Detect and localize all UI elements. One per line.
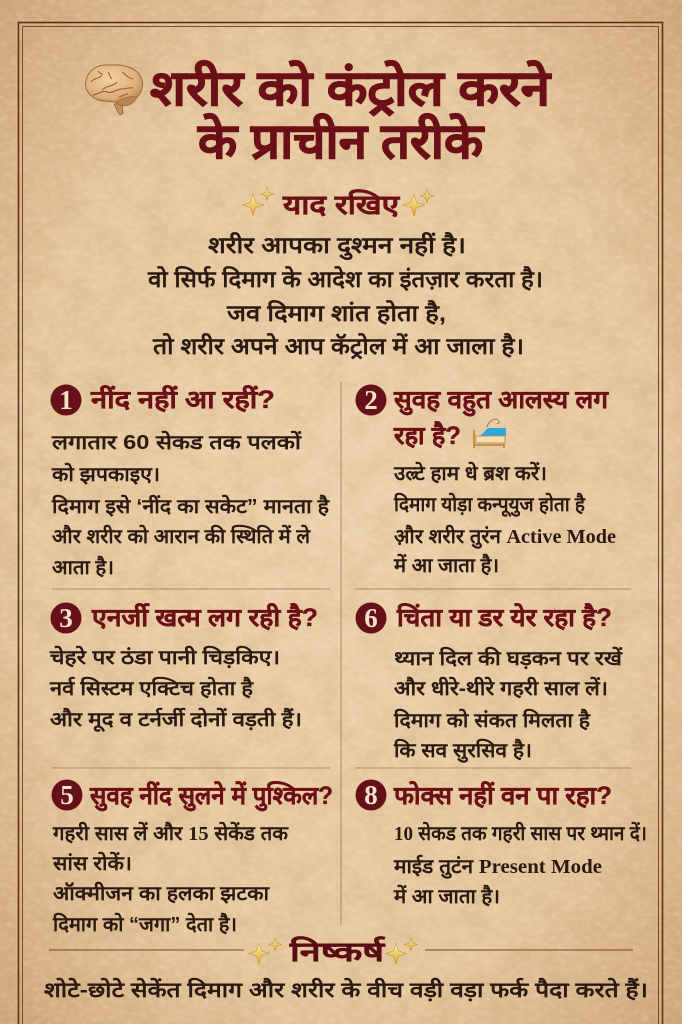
intro text: वो सिर्फ दिमाग के आदेश का इंतज़ार करता है। bbox=[147, 265, 543, 292]
icon: bed bbox=[474, 419, 506, 448]
intro text: जव दिमाग शांत होता है, bbox=[226, 299, 446, 326]
heading: conclusion bbox=[49, 936, 633, 967]
panel: tip 5: ऑक्मीजन का हलका झटका bbox=[53, 881, 270, 905]
panel: tip 1: आता है। bbox=[52, 555, 114, 579]
panel: tip 1: दिमाग इसे ‘नींद का सकेट” मानता है bbox=[51, 494, 330, 518]
panel: tip 1 bbox=[50, 384, 330, 579]
panel: tip 2: सुवह वहुत आलस्य लग bbox=[393, 386, 609, 417]
panel: tip 2 bbox=[356, 384, 616, 577]
panel: tip 5: 5 bbox=[60, 780, 74, 810]
panel: tip 1: को झपकाइए। bbox=[51, 462, 160, 486]
intro text: तो शरीर अपने आप कॅट्रोल में आ जाला है। bbox=[152, 332, 524, 360]
panel: tip 2: रहा है? bbox=[393, 421, 461, 450]
icon: brain bbox=[86, 65, 143, 116]
panel: tip 8: माईड तुटंन Present Mode bbox=[393, 854, 602, 879]
heading: remember bbox=[242, 187, 434, 220]
panel: tip 8: फोक्स नहीं वन पा रहा? bbox=[393, 781, 612, 810]
panel: tip 6: थ्यान दिल की घड़कन पर रखें bbox=[394, 646, 624, 670]
title: के प्राचीन तरीके bbox=[197, 113, 485, 169]
panel: tip 5: सुवह नींद सुलने में पुश्किल? bbox=[89, 781, 333, 812]
panel: tip 8 bbox=[356, 780, 647, 908]
panel: tip 1: नींद नहीं आ रहीं? bbox=[90, 385, 275, 414]
panel: tip 3: और मूद व टर्नर्जी दोनों वड़ती हैं। bbox=[50, 707, 302, 732]
panel: tip 6: चिंता या डर येर रहा है? bbox=[396, 603, 612, 632]
panel: tip 2: 2 bbox=[364, 385, 378, 415]
panel: tip 3: नर्व सिस्टम एक्टिच होता है bbox=[49, 676, 255, 700]
heading: conclusion: निष्कर्ष bbox=[289, 936, 386, 967]
panel: tip 1: लगातार 60 सेकड तक पलकों bbox=[51, 430, 302, 454]
panel: tip 6: दिमाग को संकत मिलता है bbox=[393, 708, 591, 732]
panel: tip 6: और धीरे-थीरे गहरी साल लें। bbox=[394, 676, 608, 700]
panel: tip 8: में आ जाता है। bbox=[393, 884, 500, 908]
panel: tip 2: में आ जाता है। bbox=[393, 553, 499, 577]
panel: tip 5 bbox=[52, 780, 333, 936]
title bbox=[150, 60, 552, 169]
panel: tip 6: 6 bbox=[364, 603, 378, 633]
panel: tip 2: उल्र्टे हाम धे ब्रश करें। bbox=[393, 461, 547, 485]
panel: tip 8: 10 सेकड तक गहरी सास पर थ्मान दें। bbox=[394, 821, 647, 845]
panel: tip 3: चेहरे पर ठंडा पानी चिड़किए। bbox=[49, 645, 280, 669]
panel: tip 5: गहरी सास लें और 15 सेकेंड तक bbox=[52, 821, 290, 845]
panel: tip 6 bbox=[356, 602, 624, 763]
intro text bbox=[147, 231, 543, 360]
panel: tip 3 bbox=[49, 602, 318, 732]
panel: tip 6: कि सव सुरसिव है। bbox=[393, 738, 532, 763]
panel: tip 5: सांस रोकें। bbox=[52, 851, 132, 875]
heading: remember: याद रखिए bbox=[282, 189, 400, 220]
panel: tip 3: 3 bbox=[59, 603, 73, 633]
conclusion text: शोटे-छोटे सेकेंत दिमाग और शरीर के वीच वड़ी वड़ा फर्क पैदा करते हैं। bbox=[44, 977, 648, 1002]
panel: tip 1: 1 bbox=[59, 385, 73, 415]
panel: tip 1: और शरीर को आरान की स्थिति में ले bbox=[52, 524, 311, 548]
panel: tip 8: 8 bbox=[364, 780, 378, 810]
panel: tip 3: एनर्जी खत्म लग रही है? bbox=[91, 603, 318, 632]
panel: tip 2: औ़र शरीर तुरंन Active Mode bbox=[394, 524, 616, 549]
panel: tip 5: दिमाग को “जगा” देता है। bbox=[52, 912, 237, 936]
title: शरीर को कंट्रोल करने bbox=[150, 60, 552, 117]
intro text: शरीर आपका दुश्मन नहीं है। bbox=[208, 231, 466, 261]
panel: tip 2: दिमाग योड़ा कन्पूयुज होता है bbox=[393, 492, 586, 517]
